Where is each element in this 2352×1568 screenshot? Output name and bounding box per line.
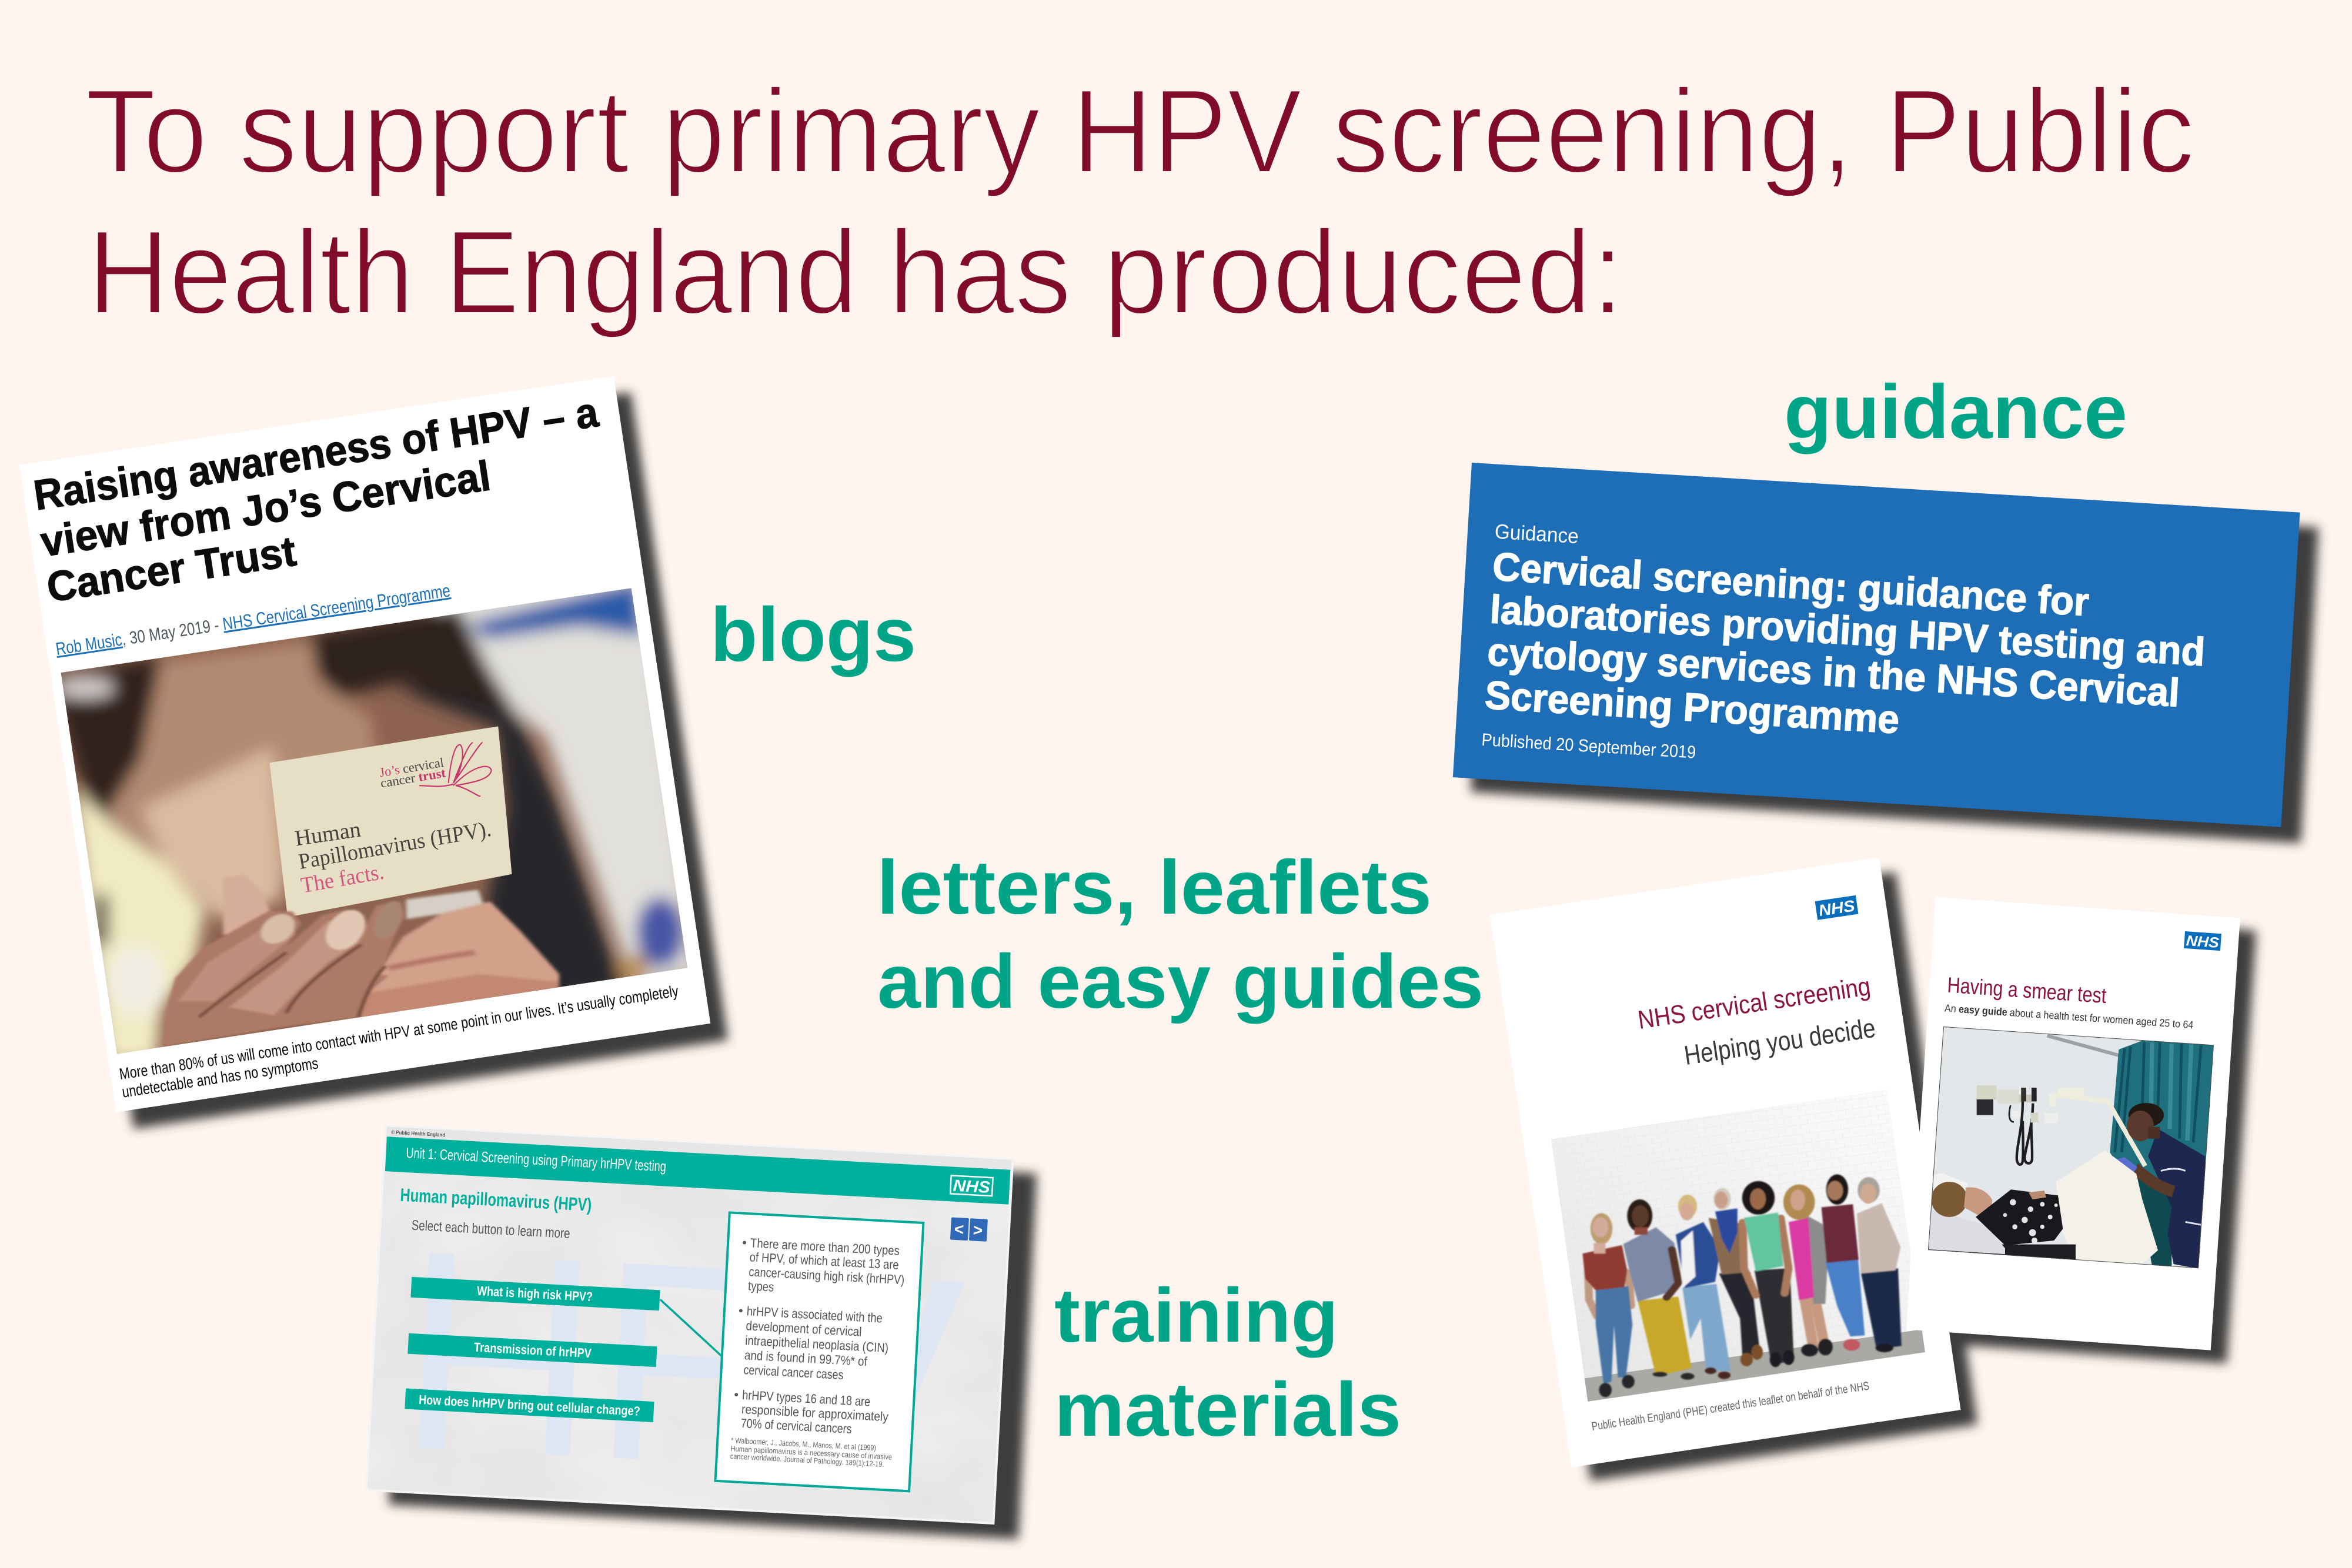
panel: leaflet having a smear test xyxy=(1906,897,2240,1350)
label: letters, leaflets and easy guides: and easy guides xyxy=(877,938,1484,1024)
blog card shadow xyxy=(37,392,728,1129)
woman 7 xyxy=(1822,1174,1865,1350)
slide instruction: Select each button to learn more xyxy=(411,1218,570,1242)
wall equipment xyxy=(1977,1085,2058,1165)
title: HPV xyxy=(1072,65,1302,198)
label: guidance: guidance xyxy=(1784,369,2127,454)
text box: * Walboomer, J., Jacobs, M., Manos, M. et al (1999) xyxy=(731,1436,876,1452)
blog photo: woman holding leaflet xyxy=(49,570,702,1066)
panel: training slide xyxy=(365,1125,1037,1539)
label: letters, leaflets and easy guides xyxy=(877,844,1484,1024)
slide heading: Human papillomavirus (HPV) xyxy=(400,1185,592,1215)
text box: cervical cancer cases xyxy=(743,1362,844,1382)
leaflet title: NHS cervical screening xyxy=(1636,972,1872,1035)
text box: Human papillomavirus is a necessary cause of invasive xyxy=(730,1444,893,1462)
guidance headline xyxy=(1484,544,2209,760)
label: training materials: training xyxy=(1054,1272,1338,1358)
text box: hrHPV types 16 and 18 are xyxy=(742,1388,871,1409)
leaflet subtitle: Helping you decide xyxy=(1682,1012,1877,1071)
training slide content xyxy=(365,1125,1014,1524)
navigation arrows: > xyxy=(973,1221,983,1239)
text box: of HPV, of which at least 13 are xyxy=(749,1249,899,1272)
woman 6 xyxy=(1783,1185,1833,1356)
title xyxy=(85,65,2194,339)
blog heading: Raising awareness of HPV – a xyxy=(31,389,602,519)
training slide shadow xyxy=(389,1140,1037,1539)
button: transmission xyxy=(407,1333,657,1367)
label: training materials: materials xyxy=(1054,1366,1401,1452)
connector line xyxy=(657,1299,725,1356)
title: has xyxy=(888,206,1071,339)
title: screening, xyxy=(1332,65,1853,198)
leaflet footer: Public Health England (PHE) created this leaflet on behalf of the NHS xyxy=(1591,1379,1870,1433)
text box: There are more than 200 types xyxy=(750,1235,900,1258)
leaflet held in hand: Human xyxy=(293,817,362,851)
text box: cancer-causing high risk (hrHPV) xyxy=(749,1264,905,1287)
text box: development of cervical xyxy=(746,1318,862,1339)
blog caption xyxy=(118,982,683,1101)
text box xyxy=(716,1212,923,1491)
text box: hrHPV is associated with the xyxy=(746,1303,883,1325)
woman 8 xyxy=(1857,1177,1902,1352)
text box: 70% of cervical cancers xyxy=(740,1416,852,1436)
NHS logo white: NHS xyxy=(953,1176,991,1196)
label: training materials xyxy=(1054,1272,1401,1452)
panel: leaflet helping you decide xyxy=(1490,857,1961,1467)
leaflet held in hand xyxy=(269,726,512,917)
title: produced: xyxy=(1103,206,1624,339)
label: letters, leaflets and easy guides: letters, leaflets xyxy=(877,844,1432,930)
text box: • xyxy=(742,1235,747,1250)
guidance headline: Screening Programme xyxy=(1484,673,1900,742)
blog byline: Rob Music, 30 May 2019 - NHS Cervical Screening Programme xyxy=(55,581,452,659)
leaflet held in hand: cancer trust xyxy=(379,765,447,791)
guidance headline: Cervical screening: guidance for xyxy=(1491,544,2090,624)
text box: and is found in 99.7%* of xyxy=(744,1348,868,1369)
text box: types xyxy=(748,1278,774,1295)
guidance headline: cytology services in the NHS Cervical xyxy=(1486,629,2181,716)
title: Health xyxy=(88,206,414,339)
title: primary xyxy=(662,65,1040,198)
sheet xyxy=(2056,1151,2158,1264)
blog photo: hand xyxy=(163,874,559,1047)
blog caption: More than 80% of us will come into contact with HPV at some point in our lives. It’s usually completely xyxy=(118,982,680,1083)
leaflet held in hand: Papillomavirus (HPV). xyxy=(297,817,493,874)
woman 5 xyxy=(1742,1181,1795,1367)
large pale HPV watermark xyxy=(419,1253,964,1476)
NHS logo blue: NHS xyxy=(1818,897,1856,920)
header band title: Unit 1: Cervical Screening using Primary hrHPV testing xyxy=(406,1145,667,1175)
blog heading: Cancer Trust xyxy=(44,528,299,611)
leaflet held in hand: Jo’s cervical xyxy=(379,754,445,780)
leaflet shadows xyxy=(1506,872,2256,1481)
woman 2 xyxy=(1623,1199,1695,1380)
woman 3 xyxy=(1676,1195,1731,1379)
navigation arrows: < xyxy=(954,1220,964,1239)
navigation arrows xyxy=(950,1218,988,1242)
blog caption: undetectable and has no symptoms xyxy=(121,1054,319,1101)
leaflet held in hand: The facts. xyxy=(299,860,386,898)
title: support xyxy=(239,65,629,198)
label: blogs: blogs xyxy=(710,591,916,677)
blog heading: view from Jo’s Cervical xyxy=(38,452,493,566)
guidance banner content xyxy=(1453,463,2300,827)
patient xyxy=(1927,1173,2076,1262)
nurse xyxy=(2109,1103,2205,1269)
button: what is high risk HPV xyxy=(410,1277,660,1310)
woman 4 xyxy=(1709,1188,1763,1366)
copyright note: © Public Health England xyxy=(391,1129,445,1138)
button: cellular change: How does hrHPV bring out cellular change? xyxy=(419,1392,640,1419)
blog card content xyxy=(19,376,710,1112)
text box: cancer worldwide. Journal of Pathology. 189(1):12-19. xyxy=(730,1452,884,1469)
button: transmission: Transmission of hrHPV xyxy=(473,1340,592,1360)
teal header band xyxy=(385,1136,1010,1205)
guidance publish date: Published 20 September 2019 xyxy=(1481,730,1696,763)
title: To xyxy=(85,65,208,198)
lamp arm xyxy=(2049,1088,2145,1166)
title: Public xyxy=(1885,65,2194,198)
title: England xyxy=(445,206,858,339)
NHS logo blue: NHS xyxy=(2186,932,2220,951)
leaflet subtitle: An easy guide about a health test for women aged 25 to 64 xyxy=(1945,1002,2194,1031)
text box: • xyxy=(738,1303,743,1318)
guidance banner shadow xyxy=(1471,477,2318,843)
photo: clinic examination xyxy=(1925,1023,2219,1272)
curtain xyxy=(2110,1041,2214,1268)
blog heading xyxy=(30,389,616,611)
text box: responsible for approximately xyxy=(741,1402,888,1424)
photo: group of women xyxy=(1551,1090,1926,1402)
guidance headline: laboratories providing HPV testing and xyxy=(1489,587,2206,674)
guidance tag: Guidance xyxy=(1494,520,1579,548)
text box: • xyxy=(734,1387,739,1402)
woman 1 xyxy=(1582,1213,1635,1397)
panel: blog card xyxy=(19,376,728,1129)
text box: intraepithelial neoplasia (CIN) xyxy=(745,1333,889,1355)
panel: guidance banner xyxy=(1453,463,2318,843)
leaflet title: Having a smear test xyxy=(1947,973,2107,1008)
button: what is high risk HPV: What is high risk HPV? xyxy=(477,1283,593,1304)
